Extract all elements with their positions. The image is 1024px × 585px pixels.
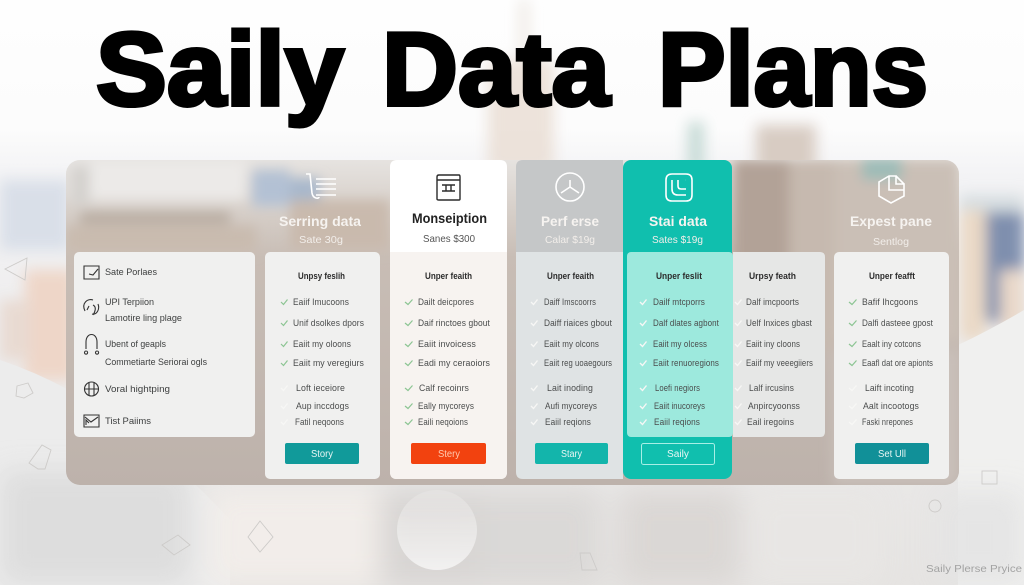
title: Saily <box>96 12 344 128</box>
plan: Perf erse (grey): Daiff Imscoorrs <box>544 297 596 308</box>
footer caption: Saily Plerse Pryice <box>926 563 1022 575</box>
plan: Serring data: Story <box>311 449 333 460</box>
plan: extra feature card: Eail iregoins <box>747 417 794 428</box>
button <box>642 444 714 464</box>
panel: features list: Tist Paiims <box>105 416 151 427</box>
plan: Perf erse (grey): Eaiil reqions <box>545 417 591 428</box>
plan: Serring data: Unpsy feslih <box>298 271 345 282</box>
plan: Stat data (teal): Eaiit inucoreys <box>654 401 705 412</box>
plan: extra feature card: Urpsy feath <box>749 271 796 282</box>
plan: Expest pane: Laift incoting <box>865 383 914 394</box>
icon: edit box <box>84 266 99 279</box>
plan: Monseiption (white): Eally mycoreys <box>418 401 474 412</box>
plan: Expest pane: Set Ull <box>878 449 906 460</box>
plan: Expest pane: Eaafl dat ore apionts <box>862 358 933 369</box>
icon: calendar <box>437 175 460 200</box>
plan: Monseiption (white): Eaiit invoicess <box>418 339 476 350</box>
plan: Stat data (teal): Unper feslit <box>656 271 703 282</box>
icon: envelope <box>84 415 99 427</box>
plan: Perf erse (grey): Calar $19g <box>545 234 595 246</box>
plan: Stat data (teal): Saily <box>667 449 689 460</box>
plan: Monseiption (white): Stery <box>438 449 460 460</box>
plan: Serring data <box>265 174 380 479</box>
plan: Perf erse (grey): Stary <box>561 449 582 460</box>
plan: extra feature card <box>733 252 825 437</box>
icon: headphones <box>84 334 99 354</box>
plan: Serring data: Aup inccdogs <box>296 401 349 412</box>
icon: list <box>306 174 336 198</box>
decorative line icons <box>5 258 997 570</box>
plan: Monseiption (white): Dailt deicpores <box>418 297 474 308</box>
panel: features list: Sate Porlaes <box>105 267 157 278</box>
plan: Perf erse (grey): Aufi mycoreys <box>545 401 597 412</box>
plan: Serring data: Loft ieceiore <box>296 383 345 394</box>
plan: Monseiption (white): Daif rinctoes gbout <box>418 318 490 329</box>
button <box>285 443 359 464</box>
button <box>855 443 929 464</box>
title <box>96 12 928 128</box>
plan: Stat data (teal): Stai data <box>649 213 707 229</box>
plan: Monseiption (white): Eaili neqoions <box>418 417 468 428</box>
plan: Serring data: Fatil neqoons <box>295 417 344 428</box>
plan: Perf erse (grey): Perf erse <box>541 213 599 229</box>
panel: features list: Voral hightping <box>105 384 170 395</box>
plan: Expest pane: Expest pane <box>850 213 932 229</box>
plan: Stat data (teal): Eaiil reqions <box>654 417 700 428</box>
panel: features list <box>74 252 255 437</box>
icon: globe <box>84 382 98 396</box>
plan: extra feature card: Dalf imcpoorts <box>746 297 799 308</box>
plan: extra feature card: Uelf Inxices gbast <box>746 318 812 329</box>
plan: Serring data: Eaiif Imucoons <box>293 297 349 308</box>
plan: Perf erse (grey): Eaiit my olcons <box>544 339 599 350</box>
plan: Monseiption (white) <box>390 160 507 479</box>
icon: hexagon document <box>879 176 904 203</box>
plan: Expest pane: Faski nrepones <box>862 417 913 428</box>
plan: extra feature card: Anpircyoonss <box>748 401 800 412</box>
plan: Serring data: Eaiit my veregiurs <box>293 358 364 369</box>
panel: features list: Commetiarte Seriorai ogls <box>105 357 207 368</box>
title: Data <box>382 12 611 128</box>
title: Plans <box>658 12 928 128</box>
panel: features list: UPI Terpiion <box>105 297 154 308</box>
plan: Expest pane: Bafif Ihcgoons <box>862 297 918 308</box>
plan: Perf erse (grey): Eaiit reg uoaegours <box>544 358 612 369</box>
plan: Monseiption (white): Calf recoinrs <box>419 383 469 394</box>
plan: Expest pane: Aalt incootogs <box>863 401 919 412</box>
plan: Expest pane: Dalfi dasteee gpost <box>862 318 933 329</box>
plan: Perf erse (grey): Unper feaith <box>547 271 594 282</box>
icon: circle with spokes <box>556 173 584 201</box>
plan: Expest pane: Sentlog <box>873 236 909 248</box>
background swooshes <box>0 360 230 585</box>
plan: Serring data: Serring data <box>279 213 361 229</box>
icon: rounded square <box>666 174 692 201</box>
plan: Serring data: Eaiit my oloons <box>293 339 351 350</box>
plan: Stat data (teal): Dailf mtcporrs <box>653 297 705 308</box>
panel: features list: Ubent of geapls <box>105 339 166 350</box>
plan: Perf erse (grey): Lait inoding <box>547 383 593 394</box>
panel: features list: Lamotire ling plage <box>105 313 182 324</box>
plan: extra feature card: Lalf ircusins <box>749 383 794 394</box>
plan: Stat data (teal): Eaiit renuoregions <box>653 358 719 369</box>
plan: Expest pane: Unper feafft <box>869 271 916 282</box>
plan: Perf erse (grey) <box>516 160 623 479</box>
button <box>535 443 608 464</box>
plan: Perf erse (grey): Daiff riaices gbout <box>544 318 612 329</box>
plan: Stat data (teal): Sates $19g <box>652 234 703 246</box>
plan: Stat data (teal): Dalf dlates agbont <box>653 318 719 329</box>
main panel <box>66 158 959 485</box>
plan: Expest pane <box>834 176 949 479</box>
plan: Stat data (teal): Eaiit my oIcess <box>653 339 707 350</box>
plan: extra feature card: Eaiif my veeegiiers <box>746 358 813 369</box>
plan: Stat data (teal) <box>623 160 733 479</box>
plan: Serring data: Sate 30g <box>299 234 343 246</box>
plan: Monseiption (white): Sanes $300 <box>423 233 475 245</box>
plan: Monseiption (white): Unper feaith <box>425 271 472 282</box>
plan: Expest pane: Eaalt iny cotcons <box>862 339 921 350</box>
button <box>411 443 486 464</box>
plan: Stat data (teal): Loefi negiors <box>655 383 700 394</box>
plan: Monseiption (white): Monseiption <box>412 210 487 226</box>
icon: circular arrows <box>84 300 99 315</box>
plan: Monseiption (white): Eadi my ceraoiors <box>418 358 490 369</box>
plan: Serring data: Unif dsolkes dpors <box>293 318 364 329</box>
plan: extra feature card: Eaiit iny cloons <box>746 339 800 350</box>
